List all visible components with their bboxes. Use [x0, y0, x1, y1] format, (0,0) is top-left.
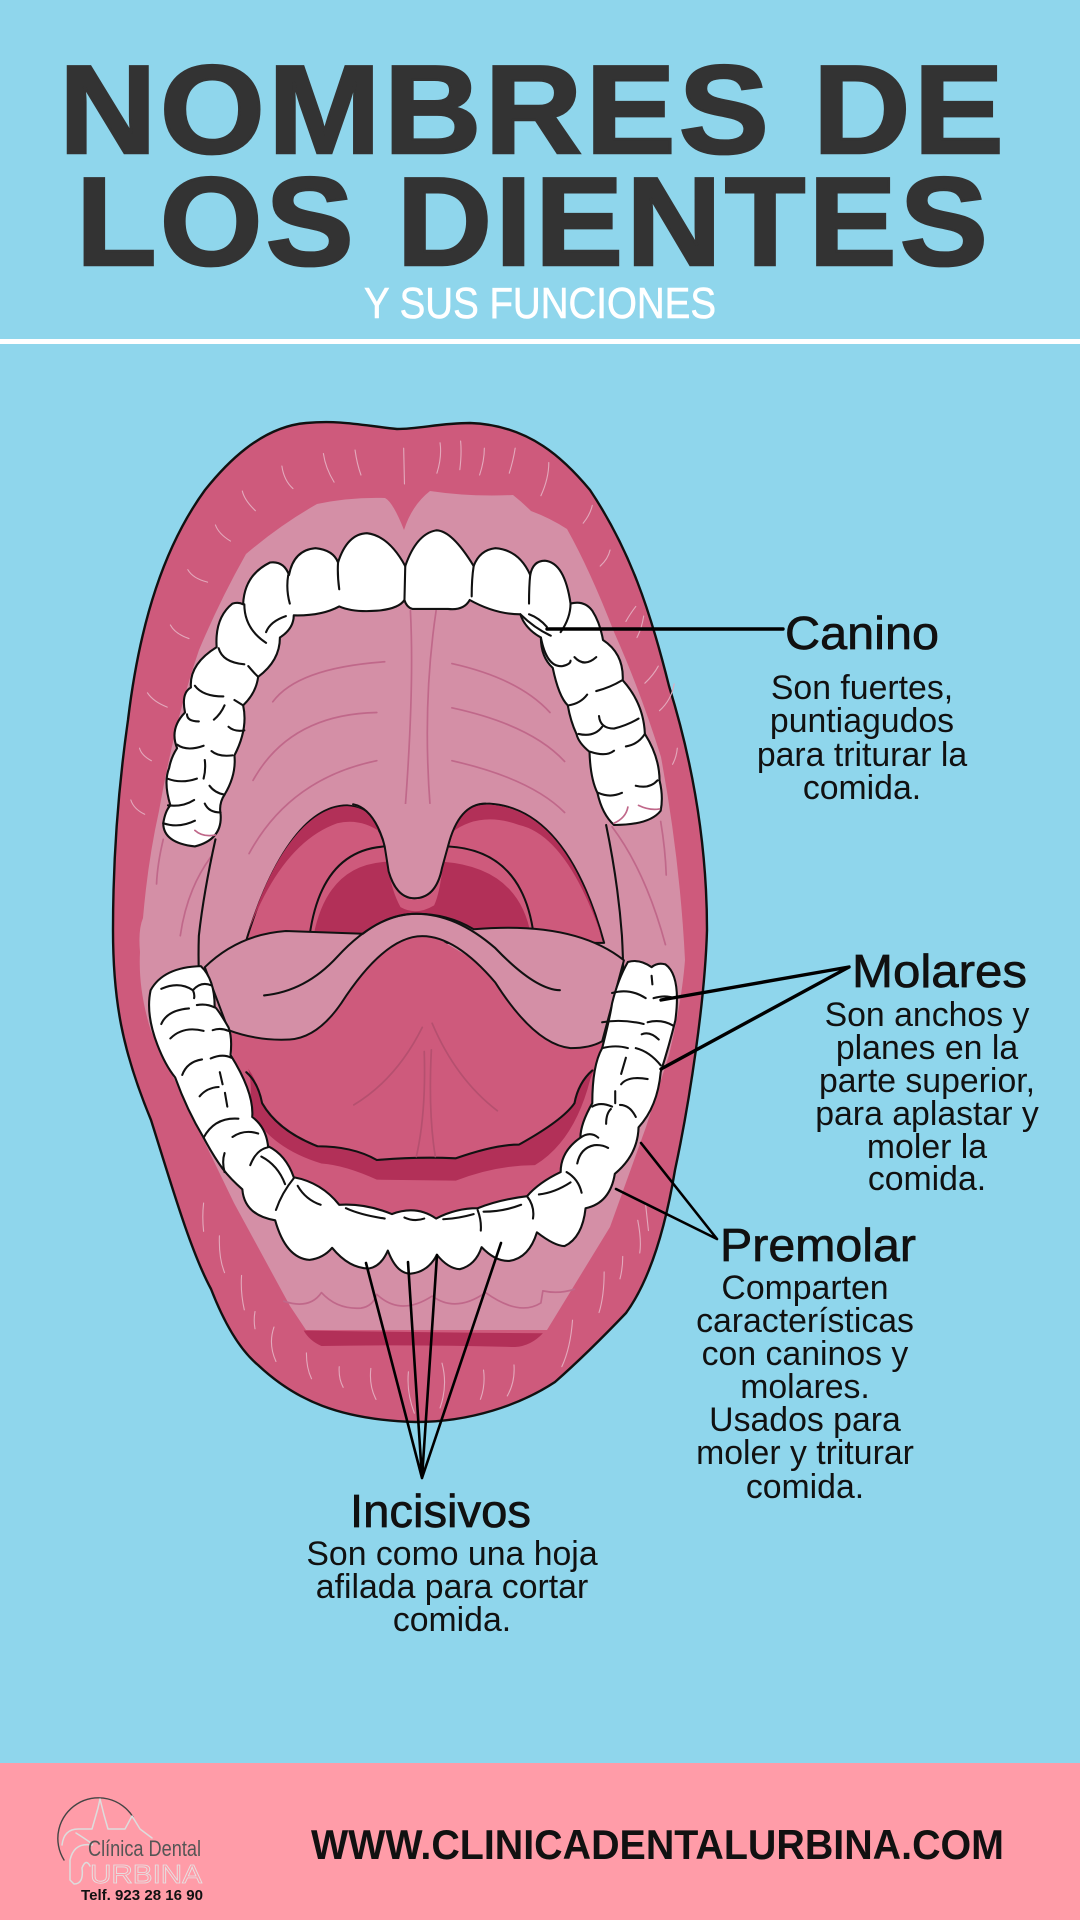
callout: incisivos — [306, 1243, 598, 1639]
subtitle: Y SUS FUNCIONES — [364, 279, 716, 328]
illustration: open mouth — [113, 422, 707, 1422]
text: incisivos — [306, 1535, 598, 1639]
text: canino: Son fuertes, — [771, 669, 953, 707]
label: canino: Canino — [785, 607, 939, 659]
arrows: premolar — [616, 1143, 717, 1239]
upper jaw — [131, 441, 677, 1004]
text: canino — [757, 669, 967, 807]
text: molares: parte superior, — [819, 1062, 1035, 1100]
logo: URBINA — [90, 1859, 203, 1889]
text: canino: puntiagudos — [770, 702, 954, 740]
lip hair lines — [203, 1203, 648, 1413]
website url: WWW.CLINICADENTALURBINA.COM — [311, 1821, 1004, 1868]
inner mouth lining — [139, 491, 685, 1330]
lower teeth — [149, 961, 677, 1274]
text: molares: moler la — [867, 1128, 987, 1166]
arch shadow — [248, 805, 601, 936]
label: incisivos: Incisivos — [350, 1485, 531, 1537]
footer band — [0, 1763, 1080, 1920]
inner arch — [310, 846, 534, 936]
text: premolar: Comparten — [721, 1269, 889, 1307]
palate lines — [157, 611, 666, 945]
text: molares: planes en la — [836, 1029, 1018, 1067]
text: premolar: con caninos y — [702, 1335, 908, 1373]
floor shadow — [248, 1069, 594, 1181]
text: canino: para triturar la — [757, 736, 967, 774]
text: molares: comida. — [868, 1160, 986, 1198]
lips — [113, 422, 707, 1422]
text: canino: comida. — [803, 769, 921, 807]
title: LOS DIENTES — [76, 151, 991, 292]
text: premolar: Usados para — [709, 1401, 901, 1439]
text: premolar: moler y triturar — [696, 1434, 914, 1472]
lower jaw — [149, 914, 677, 1413]
tongue — [205, 914, 624, 1157]
label: premolar: Premolar — [720, 1219, 916, 1271]
arrows: molares — [661, 967, 849, 1069]
arrows: incisivos — [366, 1243, 501, 1478]
text: incisivos: Son como una hoja — [306, 1535, 598, 1573]
text: premolar: comida. — [746, 1468, 864, 1506]
side folds — [199, 825, 623, 1004]
text: incisivos: comida. — [393, 1601, 511, 1639]
throat — [314, 862, 531, 936]
uvula — [353, 804, 486, 898]
callout: canino — [547, 607, 967, 807]
mouth floor — [227, 929, 606, 1231]
throat arches — [246, 804, 604, 943]
text: molares: Son anchos y — [825, 996, 1029, 1034]
text: incisivos: afilada para cortar — [316, 1568, 588, 1606]
text: molares — [815, 996, 1039, 1198]
arrow: canino — [547, 627, 783, 631]
title — [59, 39, 1007, 292]
upper teeth — [163, 530, 662, 846]
logo — [58, 1798, 203, 1904]
logo name: Clínica Dental — [88, 1836, 201, 1861]
lower gum shadow — [304, 1330, 543, 1347]
label: molares: Molares — [852, 945, 1027, 997]
title: NOMBRES DE — [59, 39, 1007, 180]
text: molares: para aplastar y — [815, 1095, 1039, 1133]
logo phone: Telf. 923 28 16 90 — [81, 1887, 203, 1904]
callout: molares — [661, 945, 1039, 1198]
text: premolar: características — [696, 1302, 914, 1340]
text: premolar: molares. — [740, 1368, 870, 1406]
callout: premolar — [616, 1143, 916, 1506]
logo emblem — [58, 1798, 133, 1860]
gum scallops — [284, 1289, 574, 1308]
lip hair lines — [131, 441, 677, 814]
text: premolar — [696, 1269, 914, 1506]
